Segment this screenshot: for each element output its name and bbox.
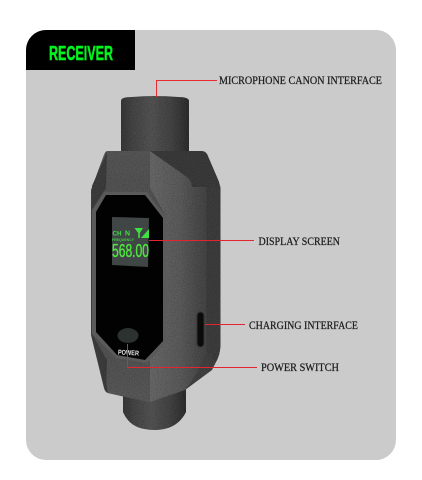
upper rear facet <box>150 151 219 190</box>
callout: power switch <box>128 344 339 374</box>
top XLR connector <box>121 96 189 165</box>
callout: microphone canon interface <box>156 75 382 97</box>
LCD display: FREQUENCY <box>112 238 134 242</box>
power button <box>118 328 138 343</box>
callout: microphone canon interface: MICROPHONE CANON INTERFACE <box>219 75 382 87</box>
title: RECEIVER <box>49 42 113 65</box>
side face <box>148 151 207 402</box>
title tab <box>26 30 135 70</box>
screen bezel <box>92 192 166 363</box>
black screen <box>96 195 163 360</box>
body silhouette <box>91 151 220 402</box>
device: wireless receiver <box>91 96 220 430</box>
callout: display screen: DISPLAY SCREEN <box>258 236 341 248</box>
background panel <box>26 30 396 460</box>
charging port <box>197 312 204 347</box>
LCD display: 568.00 <box>112 241 149 261</box>
POWER label: POWER <box>118 349 139 358</box>
side seam <box>206 187 208 352</box>
callout: charging interface: CHARGING INTERFACE <box>249 320 358 332</box>
LCD display: CH <box>112 230 122 238</box>
callout: power switch: POWER SWITCH <box>261 362 339 374</box>
LCD display <box>112 217 149 267</box>
left edge facet <box>92 152 107 392</box>
LCD display: N <box>125 230 130 238</box>
front face <box>92 151 166 402</box>
rear strip <box>207 187 220 362</box>
bottom XLR connector <box>123 385 186 430</box>
